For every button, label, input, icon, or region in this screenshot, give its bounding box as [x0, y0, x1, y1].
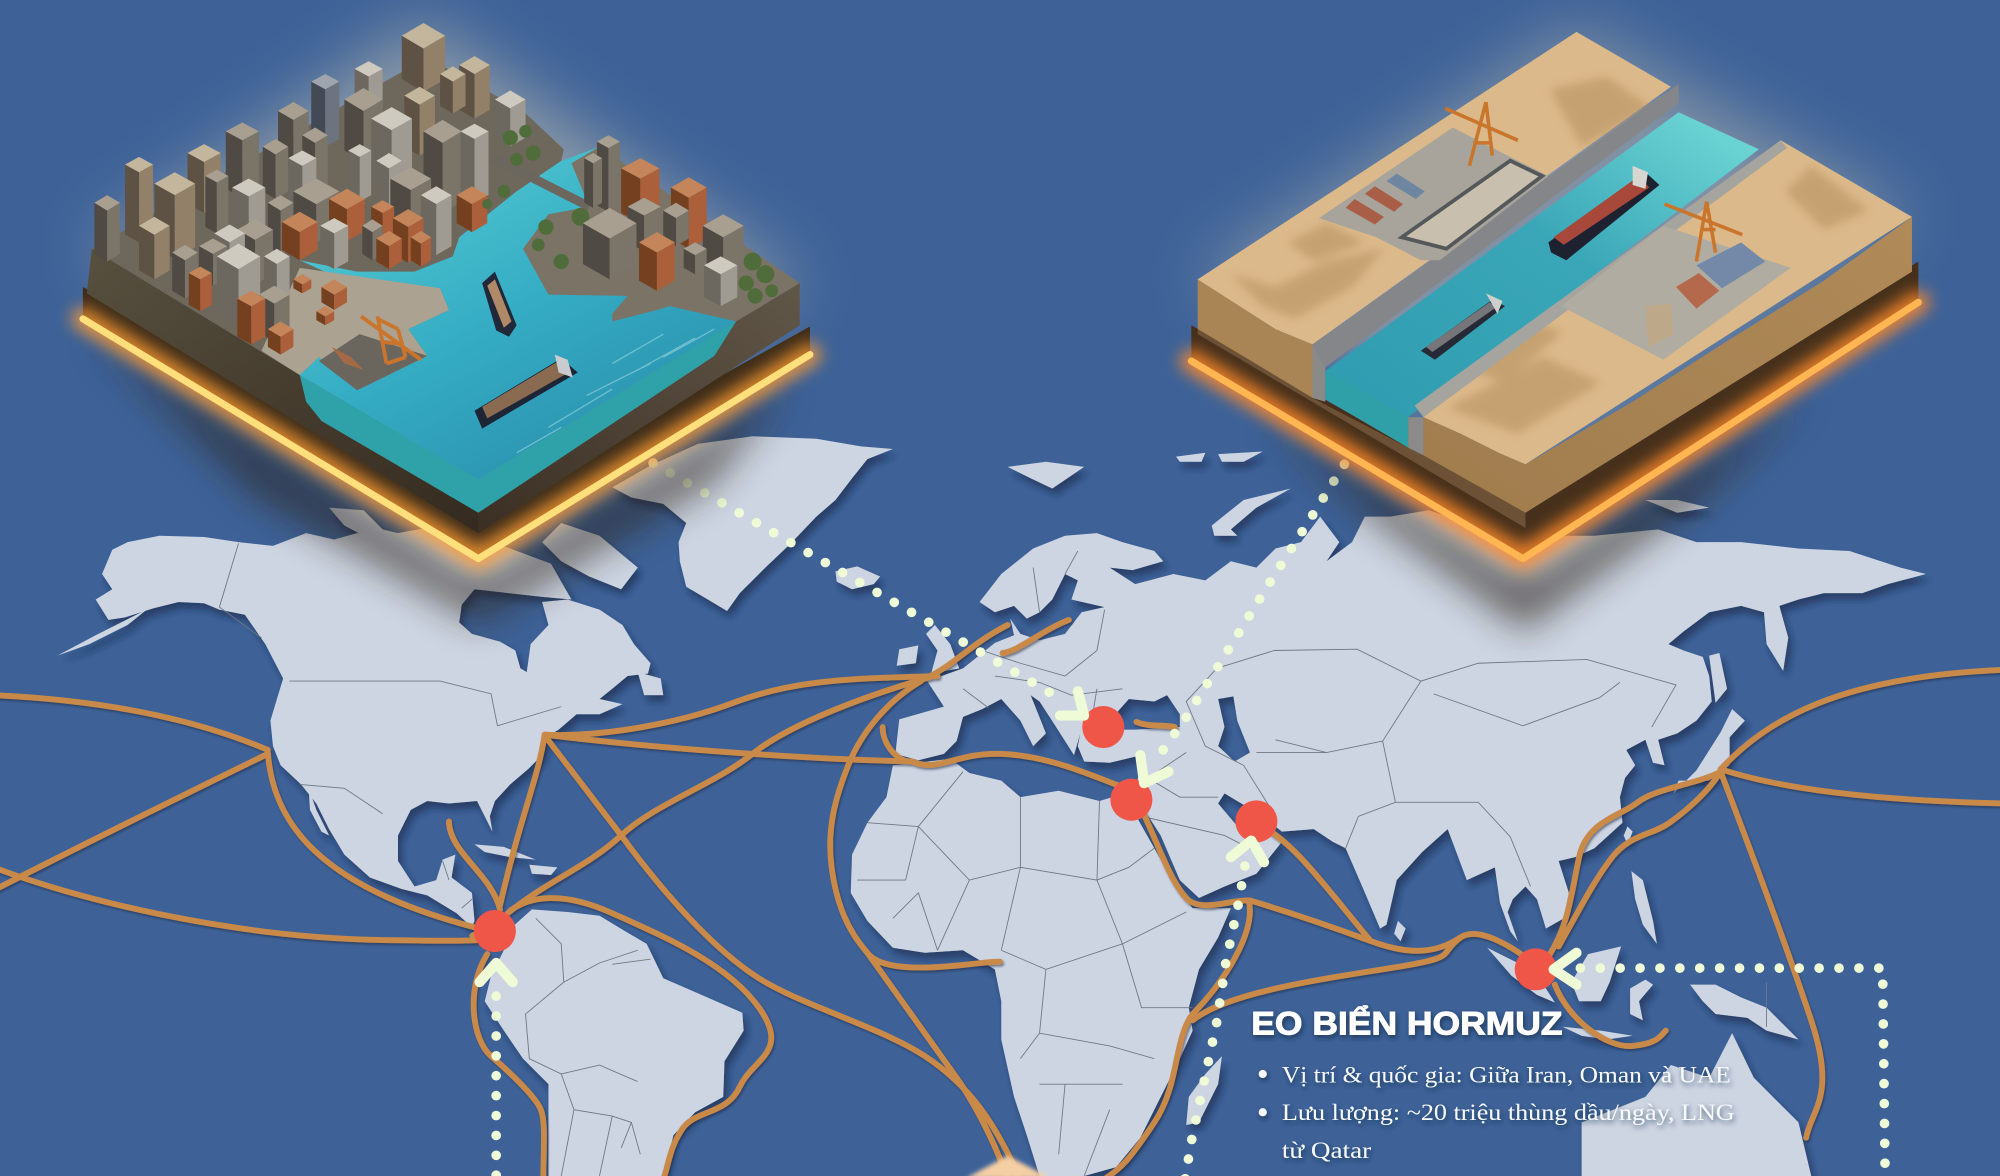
dotted connector: Panama: [492, 996, 500, 1176]
arrowhead: Hormuz: [1231, 841, 1264, 862]
rock wall right: [478, 283, 800, 533]
dune shading: [1231, 77, 1869, 434]
shipping routes: [0, 620, 2000, 1176]
halo behind canal: [1198, 26, 1912, 464]
halo behind harbour: [92, 19, 800, 510]
chokepoint marker: Malacca: [1515, 948, 1557, 990]
arrowhead: Malacca: [1554, 953, 1577, 985]
containers west dock: [1346, 173, 1425, 224]
land: North America islands: [57, 508, 663, 875]
canal water: [1325, 112, 1759, 417]
callout: Hormuz strait information: [1251, 1004, 1735, 1164]
peach glow at bottom edge of map: [966, 1156, 1051, 1176]
city buildings: [94, 23, 526, 355]
glowing base edge: [83, 319, 810, 559]
base slab: [1191, 261, 1918, 556]
sand cliff right: [1423, 217, 1912, 513]
east island buildings: [583, 135, 744, 306]
ground: city quarter: [92, 57, 564, 390]
land: North America: [96, 526, 651, 927]
water front wall: [300, 321, 736, 513]
water front wall: [1325, 371, 1408, 448]
docked container ship: [332, 347, 364, 370]
cargo ship north: [482, 272, 517, 337]
land: South America: [485, 909, 744, 1176]
rock wall left: [87, 249, 478, 533]
arrowhead: Panama: [480, 963, 513, 982]
chokepoint marker: Suez: [1110, 779, 1152, 821]
world map landmasses: [57, 436, 1926, 1176]
harbour crane: [361, 316, 421, 364]
land: British Isles: [897, 625, 959, 673]
dotted connector: canal to Suez: [1159, 464, 1344, 755]
west dock basin: [1402, 161, 1542, 249]
chokepoint marker: Panama: [474, 910, 516, 952]
bullet list: Vị trí & quốc gia: Giữa Iran, Oman và UAE: [1282, 1062, 1731, 1088]
callout heading: EO BIỂN HORMUZ: [1251, 1004, 1562, 1041]
arrowhead: Bosporus: [1060, 691, 1084, 716]
bullet list: từ Qatar: [1282, 1138, 1371, 1164]
west canal wall: [1312, 84, 1679, 367]
red tanker: [1548, 166, 1659, 260]
isometric diorama: city harbour: [83, 19, 810, 625]
land: Southeast Asia and Oceania: [1487, 946, 1811, 1176]
east dock: [1561, 226, 1791, 360]
bridge: [491, 157, 589, 207]
blue containers: [1696, 242, 1765, 288]
dockside crane machine: [1645, 304, 1673, 347]
chokepoint marker: Bosporus: [1082, 706, 1124, 748]
lower cliff strip: [1198, 329, 1526, 528]
isometric diorama: desert canal: [1191, 26, 1918, 631]
map country borders: [219, 543, 1767, 1176]
cast shadow on map: [1263, 395, 1811, 631]
sand cliff left: [1198, 279, 1312, 398]
land: Eurasia: [895, 510, 1926, 941]
land: Madagascar: [1186, 1056, 1222, 1125]
ground: east island: [523, 147, 800, 321]
dotted connector: Malacca: [1580, 968, 1885, 1176]
land: Greenland and Iceland: [612, 436, 893, 611]
harbour water surface: [300, 147, 736, 480]
crane west: [1445, 102, 1518, 166]
east canal wall: [1415, 140, 1787, 417]
bullet list: Lưu lượng: ~20 triệu thùng dầu/ngày, LNG: [1282, 1100, 1735, 1126]
canal side wall fronts: [1312, 344, 1423, 455]
trees: [482, 125, 778, 304]
container ship south: [474, 355, 578, 429]
chokepoint marker: Hormuz: [1235, 800, 1277, 842]
orange containers: [1676, 273, 1719, 309]
land: Africa: [851, 759, 1231, 1176]
pier with crane: [319, 334, 427, 390]
dotted connector: city port to Bosporus: [653, 463, 1065, 702]
small cargo ship: [1421, 293, 1505, 360]
sand top east bank: [1423, 140, 1912, 464]
bullet list: [1259, 1062, 1735, 1164]
sand top west bank: [1198, 32, 1671, 344]
cast shadow on map: [89, 334, 791, 625]
water sparkle: [517, 329, 714, 453]
base slab: [83, 287, 810, 556]
glowing base edge: [1191, 302, 1918, 559]
dotted connector: Hormuz text to Hormuz: [1185, 866, 1245, 1176]
west dock: [1319, 128, 1548, 260]
ground: promenade: [261, 268, 449, 390]
arrowhead: Suez: [1140, 755, 1168, 783]
land: Arctic and East Asian islands: [1008, 452, 1745, 944]
crane east: [1665, 202, 1742, 261]
